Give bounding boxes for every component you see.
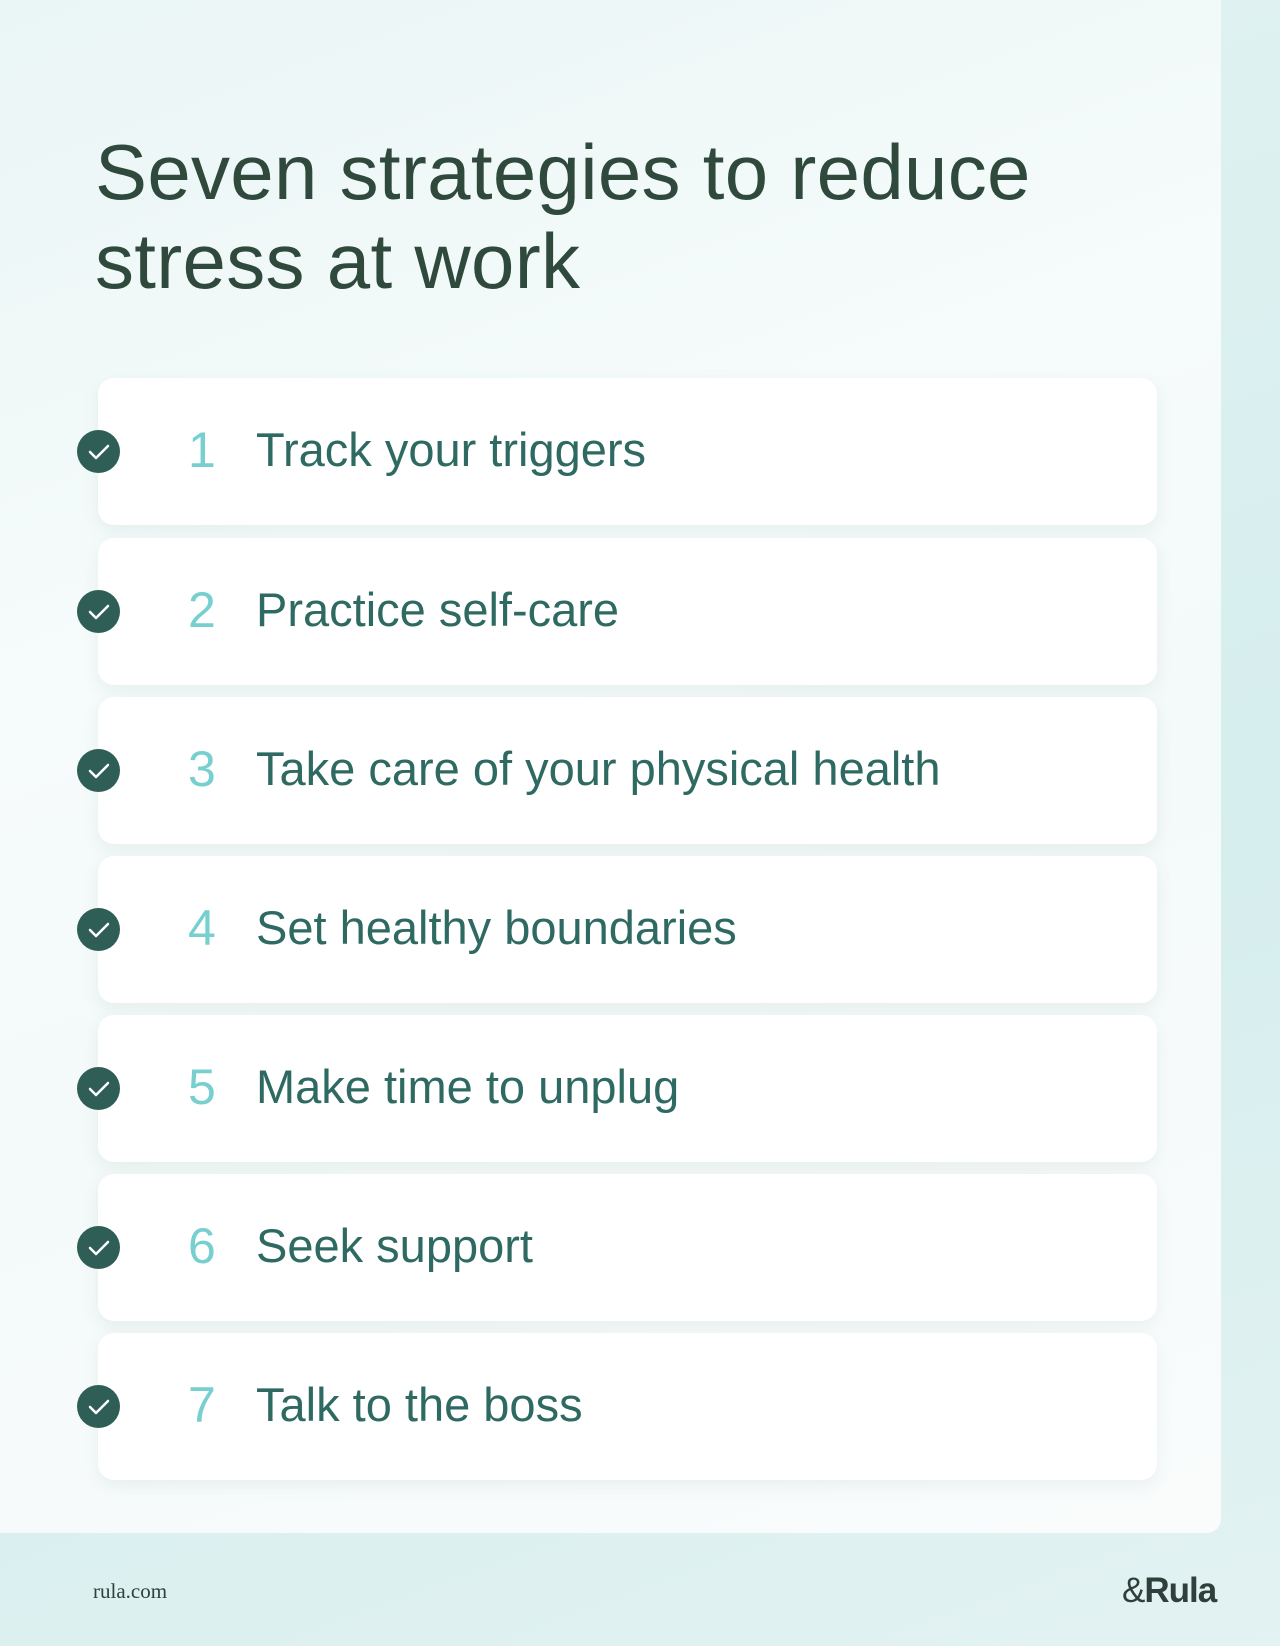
icon: check <box>77 908 120 951</box>
icon: check <box>77 1226 120 1269</box>
card 4: 4 <box>188 900 216 956</box>
title <box>95 128 1031 305</box>
icon: check <box>77 430 120 473</box>
title: stress at work <box>95 217 580 305</box>
card 7: 7 <box>188 1377 216 1433</box>
logo: &Rula <box>1122 1571 1216 1610</box>
card 3 <box>98 697 1157 844</box>
footer <box>93 1571 1218 1610</box>
card 2: 2 <box>188 582 216 638</box>
card 4: Set healthy boundaries <box>256 901 737 954</box>
card 6 <box>98 1174 1157 1321</box>
card 7: Talk to the boss <box>256 1378 583 1431</box>
card 4 <box>98 856 1157 1003</box>
icon: check <box>77 1385 120 1428</box>
title: Seven strategies to reduce <box>95 128 1031 216</box>
card 6: 6 <box>188 1218 216 1274</box>
card 1: 1 <box>188 422 216 478</box>
card 1 <box>98 378 1157 525</box>
icon: check <box>77 749 120 792</box>
card 5: 5 <box>188 1059 216 1115</box>
card 2 <box>98 538 1157 685</box>
card 6: Seek support <box>256 1219 533 1272</box>
card 3: 3 <box>188 741 216 797</box>
card 5: Make time to unplug <box>256 1060 679 1113</box>
icon: check <box>77 1067 120 1110</box>
card 5 <box>98 1015 1157 1162</box>
footer url: rula.com <box>93 1579 167 1603</box>
card 2: Practice self-care <box>256 583 619 636</box>
card 3: Take care of your physical health <box>256 742 940 795</box>
card 1: Track your triggers <box>256 423 646 476</box>
icon: check <box>77 590 120 633</box>
card 7 <box>98 1333 1157 1480</box>
